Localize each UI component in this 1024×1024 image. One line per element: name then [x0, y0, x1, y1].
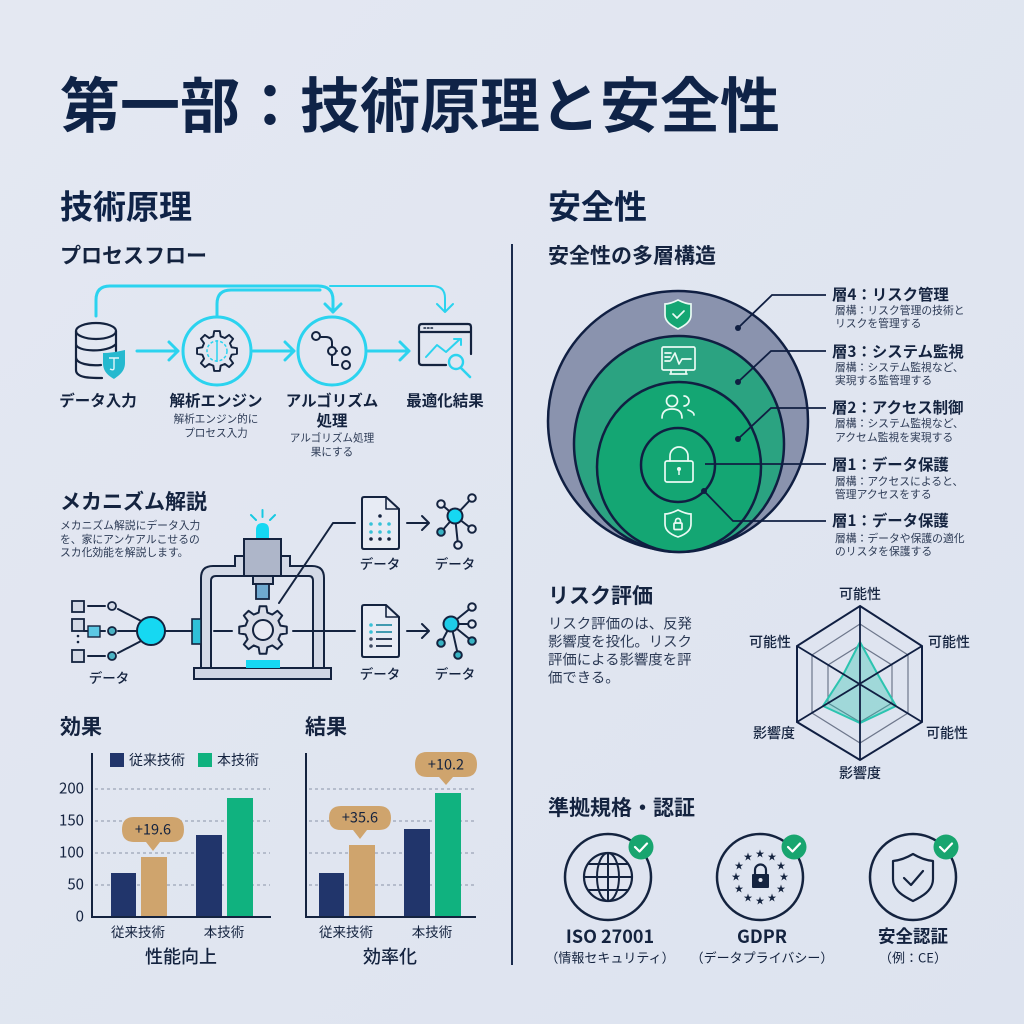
layer 4 label: 層構：リスク管理の技術と [835, 302, 965, 318]
badge: GDPR stars and lock: ★ [743, 852, 753, 862]
layer 4 label [832, 283, 965, 331]
icon: users [662, 396, 694, 418]
layer 2 label: 層構：システム監視など、 [835, 415, 964, 431]
callout: +19.6: +19.6 [135, 818, 171, 840]
heading: result: 結果 [305, 711, 347, 741]
document icon top [362, 497, 399, 549]
category labels: 従来技術 [111, 921, 165, 941]
radar labels: 影響度 [839, 763, 881, 783]
badge: GDPR stars and lock: ★ [755, 896, 765, 906]
legend: 本技術 [217, 750, 259, 770]
badge: GDPR stars and lock: ★ [734, 861, 744, 871]
callout: +35.6: +35.6 [342, 806, 378, 828]
badge: GDPR stars and lock: ★ [743, 893, 753, 903]
layer 4 label: 層4：リスク管理 [832, 283, 949, 305]
category labels: 性能向上 [145, 943, 217, 969]
layer 3 label: 層3：システム監視 [832, 340, 964, 362]
risk description: 影響度を投化。リスク [548, 630, 692, 652]
badge: GDPR stars and lock: ★ [734, 884, 744, 894]
grid lines and y axis labels [59, 778, 270, 926]
label: data input: データ入力 [59, 389, 137, 411]
icon: monitor [662, 347, 695, 374]
layer 2 label: 層2：アクセス制御 [832, 396, 963, 418]
radar labels: 可能性 [749, 632, 791, 652]
output data labels: データ [360, 663, 400, 683]
panel: result chart [305, 711, 477, 969]
output data labels [360, 553, 475, 683]
grid lines and y axis labels: 50 [67, 874, 84, 894]
risk description: 評価による影響度を評 [548, 648, 691, 670]
output data labels: データ [435, 663, 475, 683]
grid lines and y axis labels: 0 [76, 906, 84, 926]
grid lines and y axis labels: 150 [59, 810, 84, 830]
legend: 従来技術 [129, 750, 185, 770]
label: algorithm processing: アルゴリズム [286, 389, 378, 411]
label: algorithm processing: 処理 [316, 409, 348, 431]
document icon bottom [362, 605, 399, 657]
mechanism description: スカ化効能を解説します。 [60, 544, 188, 560]
badge: GDPR stars and lock: ★ [755, 849, 765, 859]
panel: process flow [59, 240, 484, 460]
output data labels: データ [360, 553, 400, 573]
input data nodes [72, 601, 165, 662]
panel: layered safety structure [548, 240, 965, 559]
heading: process flow: プロセスフロー [60, 240, 207, 270]
leader lines [701, 295, 826, 521]
layer 1 second label: のリスタを保護する [835, 543, 932, 559]
radar chart [797, 606, 922, 760]
badge: GDPR stars and lock: ★ [731, 872, 741, 882]
icon: lock [665, 447, 693, 482]
category labels: 本技術 [412, 921, 452, 941]
risk description [548, 612, 692, 688]
layer 1 second label [832, 509, 965, 559]
callout: +35.6 [329, 806, 391, 839]
panel: risk assessment [548, 580, 970, 783]
heading: layered structure: 安全性の多層構造 [548, 240, 716, 270]
category labels [111, 921, 244, 969]
category labels: 効率化 [363, 943, 417, 969]
label: GDPR [691, 923, 833, 966]
label: GDPR: （データプライバシー） [691, 948, 833, 966]
badge: GDPR stars and lock: ★ [776, 861, 786, 871]
heading: mechanism: メカニズム解説 [60, 486, 207, 516]
icon: shield lock [665, 510, 691, 537]
mechanism description [60, 517, 200, 560]
flow arrows [96, 286, 453, 360]
badge: ISO 27001 globe [565, 834, 654, 920]
heading: risk assessment: リスク評価 [548, 580, 653, 610]
panel: compliance and certification [545, 792, 958, 966]
icon: shield check [665, 300, 691, 329]
layer 3 label [832, 340, 964, 388]
bars [319, 793, 461, 917]
layer 1 second label: 層構：データや保護の適化 [835, 530, 965, 546]
radar labels: 可能性 [926, 723, 968, 743]
label: algorithm processing: 果にする [311, 444, 353, 460]
machine illustration [165, 510, 355, 679]
radar labels: 影響度 [753, 723, 795, 743]
axes [306, 753, 476, 917]
icon: optimized result window [419, 324, 471, 377]
icon: database with shield [76, 323, 125, 379]
label: ISO 27001: （情報セキュリティ） [545, 948, 675, 966]
category labels [319, 921, 452, 969]
icon: analysis engine gear [183, 317, 251, 385]
risk description: リスク評価のは、反発 [548, 612, 692, 634]
layer 4 label: リスクを管理する [835, 315, 921, 331]
category labels: 従来技術 [319, 921, 373, 941]
layer 1 label: 管理アクセスをする [835, 486, 932, 502]
label: algorithm processing: アルゴリズム処理 [290, 430, 375, 446]
grid lines and y axis labels: 100 [59, 842, 84, 862]
layer 3 label: 実現する監管理する [835, 372, 932, 388]
panel: mechanism [60, 486, 476, 687]
callout: +19.6 [122, 817, 184, 851]
badge: GDPR stars and lock [717, 834, 806, 920]
category labels: 本技術 [204, 921, 244, 941]
network icon bottom [437, 603, 476, 659]
concentric layers diagram [548, 291, 808, 552]
panel: effect chart [59, 711, 271, 969]
layer 1 label: 層構：アクセスによると、 [835, 473, 963, 489]
label: optimized result: 最適化結果 [406, 389, 484, 411]
label: GDPR: GDPR [737, 923, 787, 949]
callout: +10.2: +10.2 [428, 754, 464, 774]
arrow to network top [407, 516, 429, 530]
label: analysis engine [169, 389, 263, 440]
layer 2 label [832, 396, 964, 445]
label: analysis engine: プロセス入力 [184, 426, 248, 440]
mechanism description: を、家にアンケアルこせるの [60, 531, 200, 547]
radar labels: 可能性 [928, 632, 970, 652]
label: safety certification: 安全認証 [878, 924, 948, 948]
icon: algorithm nodes [298, 317, 366, 385]
title: 第一部：技術原理と安全性 [60, 58, 780, 146]
heading: compliance: 準拠規格・認証 [548, 792, 695, 822]
callout: +10.2 [415, 752, 477, 785]
heading: safety: 安全性 [548, 180, 647, 228]
radar labels [749, 584, 970, 783]
radar labels: 可能性 [839, 584, 881, 604]
label: analysis engine: 解析エンジン的に [174, 412, 258, 426]
axes [92, 753, 271, 917]
label: ISO 27001 [545, 923, 675, 966]
label: safety certification: （例：CE） [879, 948, 947, 966]
grid lines and y axis labels: 200 [59, 778, 84, 798]
layer 2 label: アクセム監視を実現する [835, 429, 953, 445]
badge: safety certification shield [870, 834, 958, 920]
output data labels: データ [435, 553, 475, 573]
badge: GDPR stars and lock: ★ [779, 872, 789, 882]
heading: effect: 効果 [60, 711, 102, 741]
grid lines [309, 789, 476, 885]
bars [111, 798, 253, 917]
layer 1 label: 層1：データ保護 [832, 453, 949, 475]
badge: GDPR stars and lock: ★ [767, 852, 777, 862]
arrow to network bottom [407, 624, 429, 638]
badge: GDPR stars and lock: ★ [767, 893, 777, 903]
center divider [511, 244, 513, 965]
heading: technical principles: 技術原理 [60, 180, 192, 228]
badge: GDPR stars and lock: ★ [776, 884, 786, 894]
label: safety certification [878, 924, 948, 966]
label: analysis engine: 解析エンジン [169, 389, 263, 411]
mechanism description: メカニズム解説にデータ入力 [60, 517, 200, 533]
legend [110, 750, 259, 770]
network icon top [437, 494, 476, 549]
label: algorithm processing [286, 389, 378, 460]
risk description: 価できる。 [548, 666, 620, 688]
layer 1 second label: 層1：データ保護 [832, 509, 949, 531]
label: input data: データ [89, 667, 129, 687]
layer 1 label [832, 453, 963, 502]
label: ISO 27001: ISO 27001 [566, 923, 654, 949]
layer 3 label: 層構：システム監視など、 [835, 359, 964, 375]
